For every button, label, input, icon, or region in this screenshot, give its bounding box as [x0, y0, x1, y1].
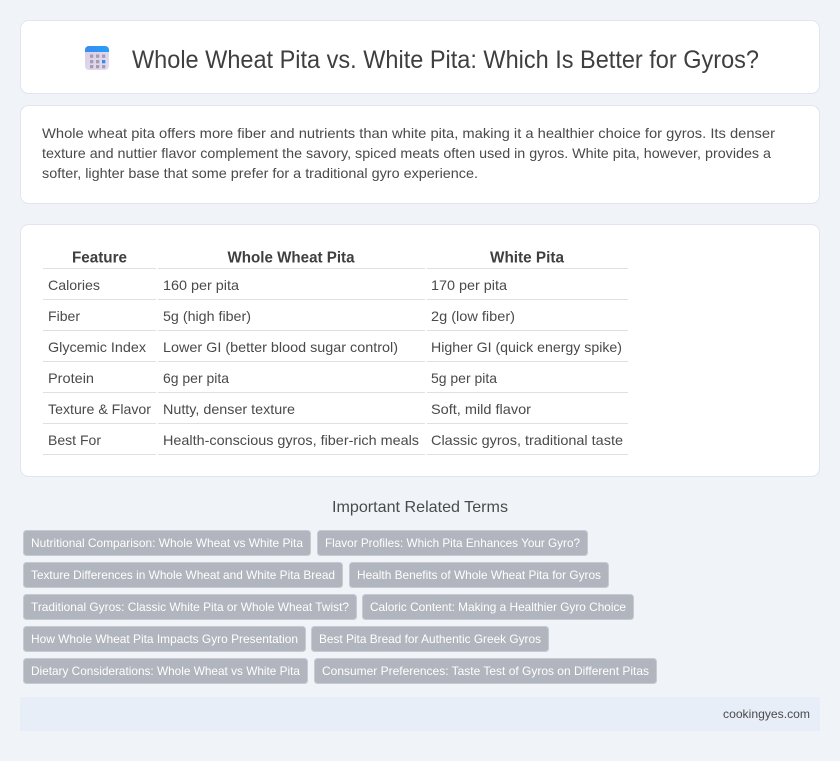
tag: Flavor Profiles: Which Pita Enhances Your Gyro? [325, 536, 580, 550]
row: texture and flavor: Texture & Flavor [48, 401, 151, 417]
tag [362, 594, 634, 620]
panel: introduction [20, 106, 820, 204]
footer [20, 697, 820, 731]
tag: Texture Differences in Whole Wheat and White Pita Bread [31, 568, 335, 582]
tag [24, 530, 310, 556]
table header: White Pita [490, 250, 564, 266]
row: fiber [48, 308, 515, 324]
row: best for: Best For [48, 432, 101, 448]
icon: calendar [85, 46, 109, 70]
table header: Whole Wheat Pita [228, 250, 355, 266]
tag [318, 530, 588, 556]
tag: Caloric Content: Making a Healthier Gyro Choice [370, 600, 626, 614]
row: fiber: Fiber [48, 308, 80, 324]
row: texture and flavor: Nutty, denser texture [163, 401, 295, 417]
tag [24, 626, 306, 652]
row: protein: Protein [48, 370, 94, 386]
tag [24, 594, 356, 620]
tag [350, 562, 608, 588]
row: best for: Health-conscious gyros, fiber-rich meals [163, 432, 419, 448]
row: protein: 6g per pita [163, 370, 229, 386]
row: fiber: 2g (low fiber) [431, 308, 515, 324]
tag: Traditional Gyros: Classic White Pita or Whole Wheat Twist? [31, 600, 349, 614]
intro text: softer, lighter base that some prefer for a traditional gyro experience. [42, 165, 478, 181]
table header [72, 250, 564, 266]
footer source: cookingyes.com [723, 707, 810, 721]
intro text: Whole wheat pita offers more fiber and nutrients than white pita, making it a healthier choice for gyros. Its denser [42, 125, 775, 141]
row: calories: 170 per pita [431, 277, 507, 293]
tag: How Whole Wheat Pita Impacts Gyro Presentation [31, 632, 298, 646]
row: protein [48, 370, 497, 386]
panel: header [20, 20, 820, 94]
row: glycemic index [48, 339, 622, 355]
tag: Nutritional Comparison: Whole Wheat vs White Pita [31, 536, 303, 550]
row: calories: 160 per pita [163, 277, 239, 293]
tags: related terms [24, 530, 656, 684]
tag [24, 562, 342, 588]
tag [312, 626, 548, 652]
row: glycemic index: Higher GI (quick energy spike) [431, 339, 622, 355]
row: glycemic index: Glycemic Index [48, 339, 146, 355]
row: texture and flavor [48, 401, 531, 417]
tag [24, 658, 308, 684]
row: calories: Calories [48, 277, 100, 293]
intro text: texture and nuttier flavor complement the savory, spiced meats often used in gyros. White pita, however, provides a [42, 145, 771, 161]
panel: comparison table [20, 224, 820, 476]
title: Whole Wheat Pita vs. White Pita: Which Is Better for Gyros? [132, 46, 759, 74]
intro text [42, 125, 775, 181]
row: texture and flavor: Soft, mild flavor [431, 401, 531, 417]
tag: Consumer Preferences: Taste Test of Gyros on Different Pitas [322, 664, 649, 678]
heading: related terms: Important Related Terms [332, 499, 508, 516]
table rules [43, 268, 628, 455]
tag [314, 658, 656, 684]
table header: Feature [72, 250, 127, 266]
row: calories [48, 277, 507, 293]
tag: Dietary Considerations: Whole Wheat vs White Pita [31, 664, 300, 678]
tag: Best Pita Bread for Authentic Greek Gyros [319, 632, 541, 646]
tag: Health Benefits of Whole Wheat Pita for Gyros [357, 568, 601, 582]
row: best for: Classic gyros, traditional taste [431, 432, 623, 448]
row: fiber: 5g (high fiber) [163, 308, 251, 324]
row: best for [48, 432, 623, 448]
row: protein: 5g per pita [431, 370, 497, 386]
row: glycemic index: Lower GI (better blood sugar control) [163, 339, 398, 355]
